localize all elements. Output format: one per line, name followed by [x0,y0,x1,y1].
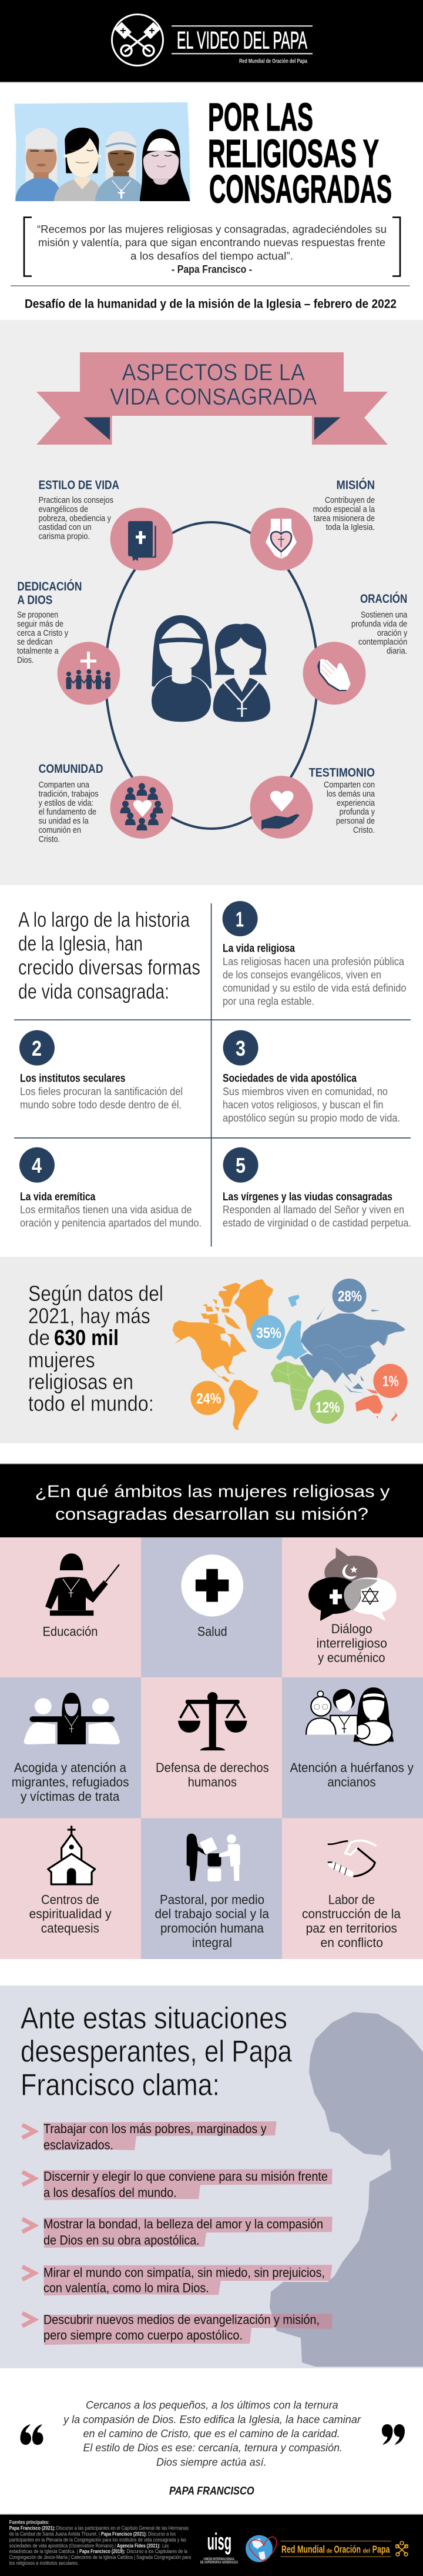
item: dedicacion a dios: cerca a Cristo y [17,629,69,638]
world map [172,1279,405,1430]
item 3: sociedades de vida apostolica: Sociedades de vida apostólica [223,1073,357,1085]
icon: two women [150,615,270,724]
closing quote: El estilo de Dios es ese: cercanía, ternura y compasión. [83,2441,343,2454]
woman with blue-banded veil [95,131,147,201]
item 1: la vida religiosa: por una regla estable. [223,995,314,1007]
bullet 1 [22,2121,277,2153]
black question band: ¿En qué ámbitos las mujeres religiosas y [35,1483,390,1501]
logo wordmark: Red Mundial de Oración del Papa [239,58,307,65]
label: salud: Salud [197,1624,227,1639]
americas [172,1279,273,1430]
label: pastoral [155,1892,270,1950]
icon: community around heart [110,776,173,839]
icon: church [48,1826,95,1884]
illustration: four women [14,102,190,201]
bullet 5: pero siempre como cuerpo apostólico. [43,2328,243,2343]
item: oracion: Sostienen una [361,610,408,620]
label: defensa de derechos: Defensa de derechos [156,1760,269,1775]
panel: formas de vida consagrada [14,901,411,1247]
statistics text: 2021, hay más [28,1303,150,1328]
panel heading: Ante estas situaciones [21,2001,287,2036]
title [208,95,392,212]
item: comunidad: su unidad es la [39,817,89,826]
item: testimonio: TESTIMONIO [309,766,375,780]
statistics text: de [28,1325,50,1350]
bubble: 24%: 24% [196,1391,221,1407]
label: dialogo interreligioso: Diálogo [331,1621,372,1636]
panel: ambitos grid [0,1537,423,1959]
panel heading: desesperantes, el Papa [21,2035,292,2069]
item: mision: Contribuyen de [325,496,375,505]
footer [0,2514,423,2576]
item 4: la vida eremitica: oración y penitencia apartados del mundo. [20,1217,202,1229]
africa [271,1361,314,1410]
icon: migrants embraced [24,1693,120,1744]
item: dedicacion a dios: A DIOS [17,593,52,607]
pope silhouette [270,2012,423,2367]
intro text: A lo largo de la historia [18,907,190,932]
prayer quote in brackets: misión y valentía, para que sigan encontrando nuevas respuestas frente [38,236,385,249]
label: dialogo interreligioso: y ecuménico [318,1650,385,1665]
item: testimonio: Comparten con [324,780,375,790]
label: labor de construccion: construcción de la [302,1907,401,1921]
label: atencion a huerfanos: Atención a huérfanos y [290,1760,414,1775]
logo: globe with heart [246,2535,277,2562]
icon: scales of justice [178,1692,247,1750]
item: comunidad: el fundamento de [39,807,96,817]
label: centros de espiritualidad: Centros de [41,1892,99,1907]
closing quote: en el camino de Cristo, que es el camino de la caridad. [83,2427,340,2440]
sources text: Discurso a los Capitulares de la [127,2548,188,2554]
label: educacion: Educación [42,1624,98,1639]
sources text: Agencia Fides (2021): [117,2542,160,2548]
sources text: estadísticas de la Iglesia Católica. | [9,2548,78,2554]
label: acogida y atencion: migrantes, refugiados [12,1774,129,1789]
sources text: Discurso a los [148,2531,176,2537]
closing quote [20,2399,405,2498]
statistics text: religiosas en [28,1369,133,1394]
item: oracion: ORACIÓN [360,591,407,606]
ribbon heading [36,352,388,445]
icon: pastoral social work [187,1834,240,1881]
logo: red mundial de oracion: Oración [334,2544,361,2555]
woman with dark hair [54,128,102,201]
icon: crossed keys logo [112,14,163,66]
icon: closing quotation mark [382,2424,405,2445]
item: estilo de vida: carisma propio. [39,532,90,542]
label: atencion a huerfanos [290,1760,414,1789]
statistics text: mujeres [28,1347,95,1372]
panel heading: Francisco clama: [21,2068,220,2102]
item 2: los institutos seculares: Los institutos seculares [20,1073,126,1085]
sources text: los religiosos e institutos seculares. [9,2560,79,2566]
item 3: sociedades de vida apostolica: Sus miembros viven en comunidad, no [223,1086,388,1097]
sources text: de la Caridad de Santa Juana Antida Thouret. | [9,2531,100,2537]
panel: aspectos de la vida consagrada [0,320,423,885]
item: testimonio: experiencia [337,799,375,808]
item: mision: modo especial a la [313,505,375,514]
bubble: 28%: 28% [338,1289,362,1305]
icon: nun with elder and child [306,1687,394,1745]
item: mision: toda la Iglesia. [326,523,375,532]
item: comunidad: y estilos de vida: [39,799,93,808]
item 2: los institutos seculares [19,1030,183,1110]
panel: world statistics [0,1257,423,1443]
logo: red mundial de oracion: Red Mundial [281,2544,325,2555]
item: testimonio: personal de [336,817,375,826]
bullet 5 [22,2313,333,2345]
label: defensa de derechos: humanos [188,1774,237,1789]
item: estilo de vida: Practican los consejos [39,496,113,505]
bubble: 1% [373,1364,407,1398]
item 3: sociedades de vida apostolica: 3 [236,1036,246,1060]
closing quote: y la compasión de Dios. Esto edifica la Iglesia, la hace caminar [62,2413,361,2425]
header band [0,0,423,82]
label: pastoral: integral [192,1936,232,1950]
bullet 1: esclavizados. [43,2138,113,2153]
statistics text: todo el mundo: [28,1391,154,1416]
logo: red mundial de oracion: Papa [372,2544,390,2555]
icon: opening quotation mark [20,2424,43,2445]
bubble: 12% [310,1390,344,1424]
icon: orange crossed keys [396,2541,408,2556]
logo: red mundial de oracion: del [363,2548,370,2555]
item: comunidad: comunión en [39,826,81,835]
item: oracion [303,591,408,705]
icon: health cross [182,1554,243,1617]
logo: red mundial de oracion [281,2541,391,2557]
statistics text: 630 mil [54,1325,119,1350]
item: dedicacion a dios: DEDICACIÓN [17,579,82,593]
item: estilo de vida [39,478,173,570]
asia [300,1306,405,1393]
item 4: la vida eremitica [19,1147,202,1229]
item: dedicacion a dios: seguir más de [17,619,63,629]
intro text [18,907,200,1003]
bubble: 35% [251,1315,285,1349]
label: centros de espiritualidad: catequesis [41,1921,99,1936]
item: mision: MISIÓN [336,478,375,492]
logo: uisg: uisg [207,2529,231,2555]
label: pastoral: del trabajo social y la [155,1907,270,1921]
item 1: la vida religiosa: 1 [236,907,244,932]
logo wordmark: EL VIDEO DEL PAPA [177,26,307,54]
item: testimonio [250,766,375,839]
closing quote: PAPA FRANCISCO [169,2485,254,2498]
item 4: la vida eremitica: Los ermitaños tienen una vida asidua de [20,1204,192,1216]
label: dialogo interreligioso [317,1621,387,1665]
item: estilo de vida: evangélicos de [39,505,88,514]
logo wordmark [172,25,313,65]
bullet 5: Descubrir nuevos medios de evangelización y misión, [43,2313,320,2327]
item: oracion: oración y [377,629,408,638]
icons in grid [24,1547,397,1884]
oceania [355,1389,398,1422]
sources text: Fuentes principales: [9,2520,49,2525]
sources text: Papa Francisco (2021): [101,2531,147,2537]
item: comunidad: Cristo. [39,835,60,844]
logo: uisg: UNIÓN INTERNACIONAL [203,2557,235,2561]
item 2: los institutos seculares: 2 [32,1036,42,1060]
item: comunidad: COMUNIDAD [39,762,103,776]
item 5: las virgenes y las viudas consagradas: Responden al llamado del Señor y viven en [223,1204,404,1216]
bubble: 12%: 12% [315,1400,340,1416]
item: testimonio: los demás una [327,789,375,799]
icon: education [45,1553,119,1616]
item: comunidad: tradición, trabajos [39,789,99,799]
sources text: sociedades de vida apostólica (Osservatore Romano) | [9,2542,116,2548]
item 3: sociedades de vida apostolica: apostólico según su propio modo de vida. [223,1112,400,1124]
black question band: consagradas desarrollan su misión? [55,1505,368,1524]
label: pastoral: Pastoral, por medio [160,1892,264,1907]
item 3: sociedades de vida apostolica: hacen votos religiosos, y buscan el fin [223,1099,383,1110]
logo: red mundial de oracion: de [327,2548,333,2555]
label: pastoral: promoción humana [160,1921,264,1936]
item: oracion: profunda vida de [351,619,407,629]
icon: interreligious dialogue [308,1547,397,1621]
sources text: Discurso a las participantes en el Capítulo General de las Hermanas [56,2525,189,2531]
item: dedicacion a dios: se dedican [17,638,53,647]
label: atencion a huerfanos: ancianos [327,1774,376,1789]
label: acogida y atencion: Acogida y atención a [14,1760,127,1775]
bullet 1: Trabajar con los más pobres, marginados y [43,2121,267,2136]
item 5: las virgenes y las viudas consagradas [223,1147,411,1229]
item 5: las virgenes y las viudas consagradas: 5 [236,1153,246,1177]
black question band [0,1463,423,1537]
icon: people under cross [58,642,120,705]
statistics text [28,1281,163,1416]
item: estilo de vida: pobreza, obediencia y [39,514,112,523]
sources text: Papa Francisco (2021): [9,2525,55,2531]
prayer quote in brackets: a los desafíos del tiempo actual”. [130,249,293,262]
item: mision: tarea misionera de [314,514,375,523]
bubble: 24% [190,1381,224,1415]
label: dialogo interreligioso: interreligioso [317,1636,387,1651]
bullet 4: con valentía, como lo mira Dios. [43,2281,209,2295]
item 3: sociedades de vida apostolica [223,1030,400,1124]
sources text [9,2520,192,2566]
item 1: la vida religiosa: La vida religiosa [223,942,295,955]
sources text: Papa Francisco (2019): [79,2548,125,2554]
item: oracion: diaria. [387,647,407,656]
bubble: 1%: 1% [382,1373,399,1390]
panel: el papa clama [0,1986,423,2368]
intro text: de la Iglesia, han [18,932,143,955]
item: testimonio: Cristo. [353,826,375,835]
icon: hands holding heart [250,508,313,570]
label: labor de construccion: paz en territorios [306,1921,397,1936]
europe [276,1295,307,1360]
bullet 3: Mostrar la bondad, la belleza del amor y la compasión [43,2217,323,2231]
ribbon heading: ASPECTOS DE LA [122,360,305,386]
item: testimonio: profunda y [340,807,375,817]
icon: praying hands [303,642,365,705]
bubble: 35%: 35% [256,1325,281,1342]
item 1: la vida religiosa: comunidad y su estilo de vida está definido [223,982,407,994]
label: labor de construccion: en conflicto [321,1936,383,1950]
panel heading [21,2001,292,2102]
item: dedicacion a dios: totalmente a [17,647,59,656]
item: oracion: contemplación [358,638,407,647]
icon: hand offering heart [250,776,313,839]
statistics text: Según datos del [28,1281,163,1306]
sources text: Las [162,2542,169,2548]
item: mision [250,478,375,570]
title: POR LAS [208,95,313,139]
item 1: la vida religiosa: Las religiosas hacen una profesión pública [223,956,405,967]
item: estilo de vida: ESTILO DE VIDA [39,478,119,492]
item 4: la vida eremitica: 4 [32,1153,42,1177]
label: labor de construccion: Labor de [328,1892,375,1907]
intro text: crecido diversas formas [18,955,200,979]
item 2: los institutos seculares: mundo sobre todo desde dentro de él. [20,1099,182,1110]
bullet 4 [22,2265,333,2295]
bullet 2: Discernir y elegir lo que conviene para su misión frente [43,2169,328,2184]
woman with white veil [15,128,62,201]
label: defensa de derechos [156,1760,269,1789]
prayer quote in brackets [24,218,400,276]
sources text: Congregación de Jesús-María | Catecismo de la Iglesia Católica | Sagrada Congregación para [9,2554,192,2560]
bubble: 28% [333,1279,367,1313]
item 1: la vida religiosa [223,901,407,1007]
bullet 2 [22,2169,333,2200]
prayer quote in brackets: “Recemos por las mujeres religiosas y consagradas, agradeciéndoles su [37,223,387,235]
label: labor de construccion [302,1892,401,1950]
intro text: de vida consagrada: [18,979,169,1003]
icon: bible [110,508,173,570]
bullet 3 [22,2217,333,2248]
bullet 3: de Dios en su obra apostólica. [43,2233,200,2247]
label: acogida y atencion [12,1760,129,1804]
closing quote: Cercanos a los pequeños, a los últimos con la ternura [86,2399,338,2411]
item 4: la vida eremitica: La vida eremítica [20,1191,96,1203]
closing quote: Dios siempre actúa así. [156,2456,267,2468]
item: dedicacion a dios [17,579,120,705]
item 2: los institutos seculares: Los fieles procuran la santificación del [20,1086,183,1097]
prayer quote in brackets: - Papa Francisco - [172,263,252,275]
bullet 2: a los desafíos del mundo. [43,2185,177,2200]
sources text: participantes en la Plenaria de la Congregación para los institutos de vida consagrada y las [9,2537,186,2542]
icon: handshake [328,1841,376,1876]
oval ring [106,522,317,829]
ribbon heading: VIDA CONSAGRADA [110,384,317,410]
item 1: la vida religiosa: de los consejos evangélicos, viven en [223,969,381,981]
item: dedicacion a dios: Se proponen [17,610,58,620]
label: acogida y atencion: y víctimas de trata [21,1789,120,1804]
label: centros de espiritualidad: espiritualidad y [29,1907,112,1921]
item: dedicacion a dios: Dios. [17,656,33,665]
logo: uisg [200,2529,238,2564]
item: comunidad [39,762,173,844]
logo: uisg: DE SUPERIORAS GENERALES [200,2561,238,2564]
item: comunidad: Comparten una [39,780,90,790]
bullet 4: Mirar el mundo con simpatía, sin miedo, sin prejuicios, [43,2265,325,2280]
item: estilo de vida: castidad con un [39,523,92,532]
label: centros de espiritualidad [29,1892,112,1936]
woman with black veil [140,129,190,201]
